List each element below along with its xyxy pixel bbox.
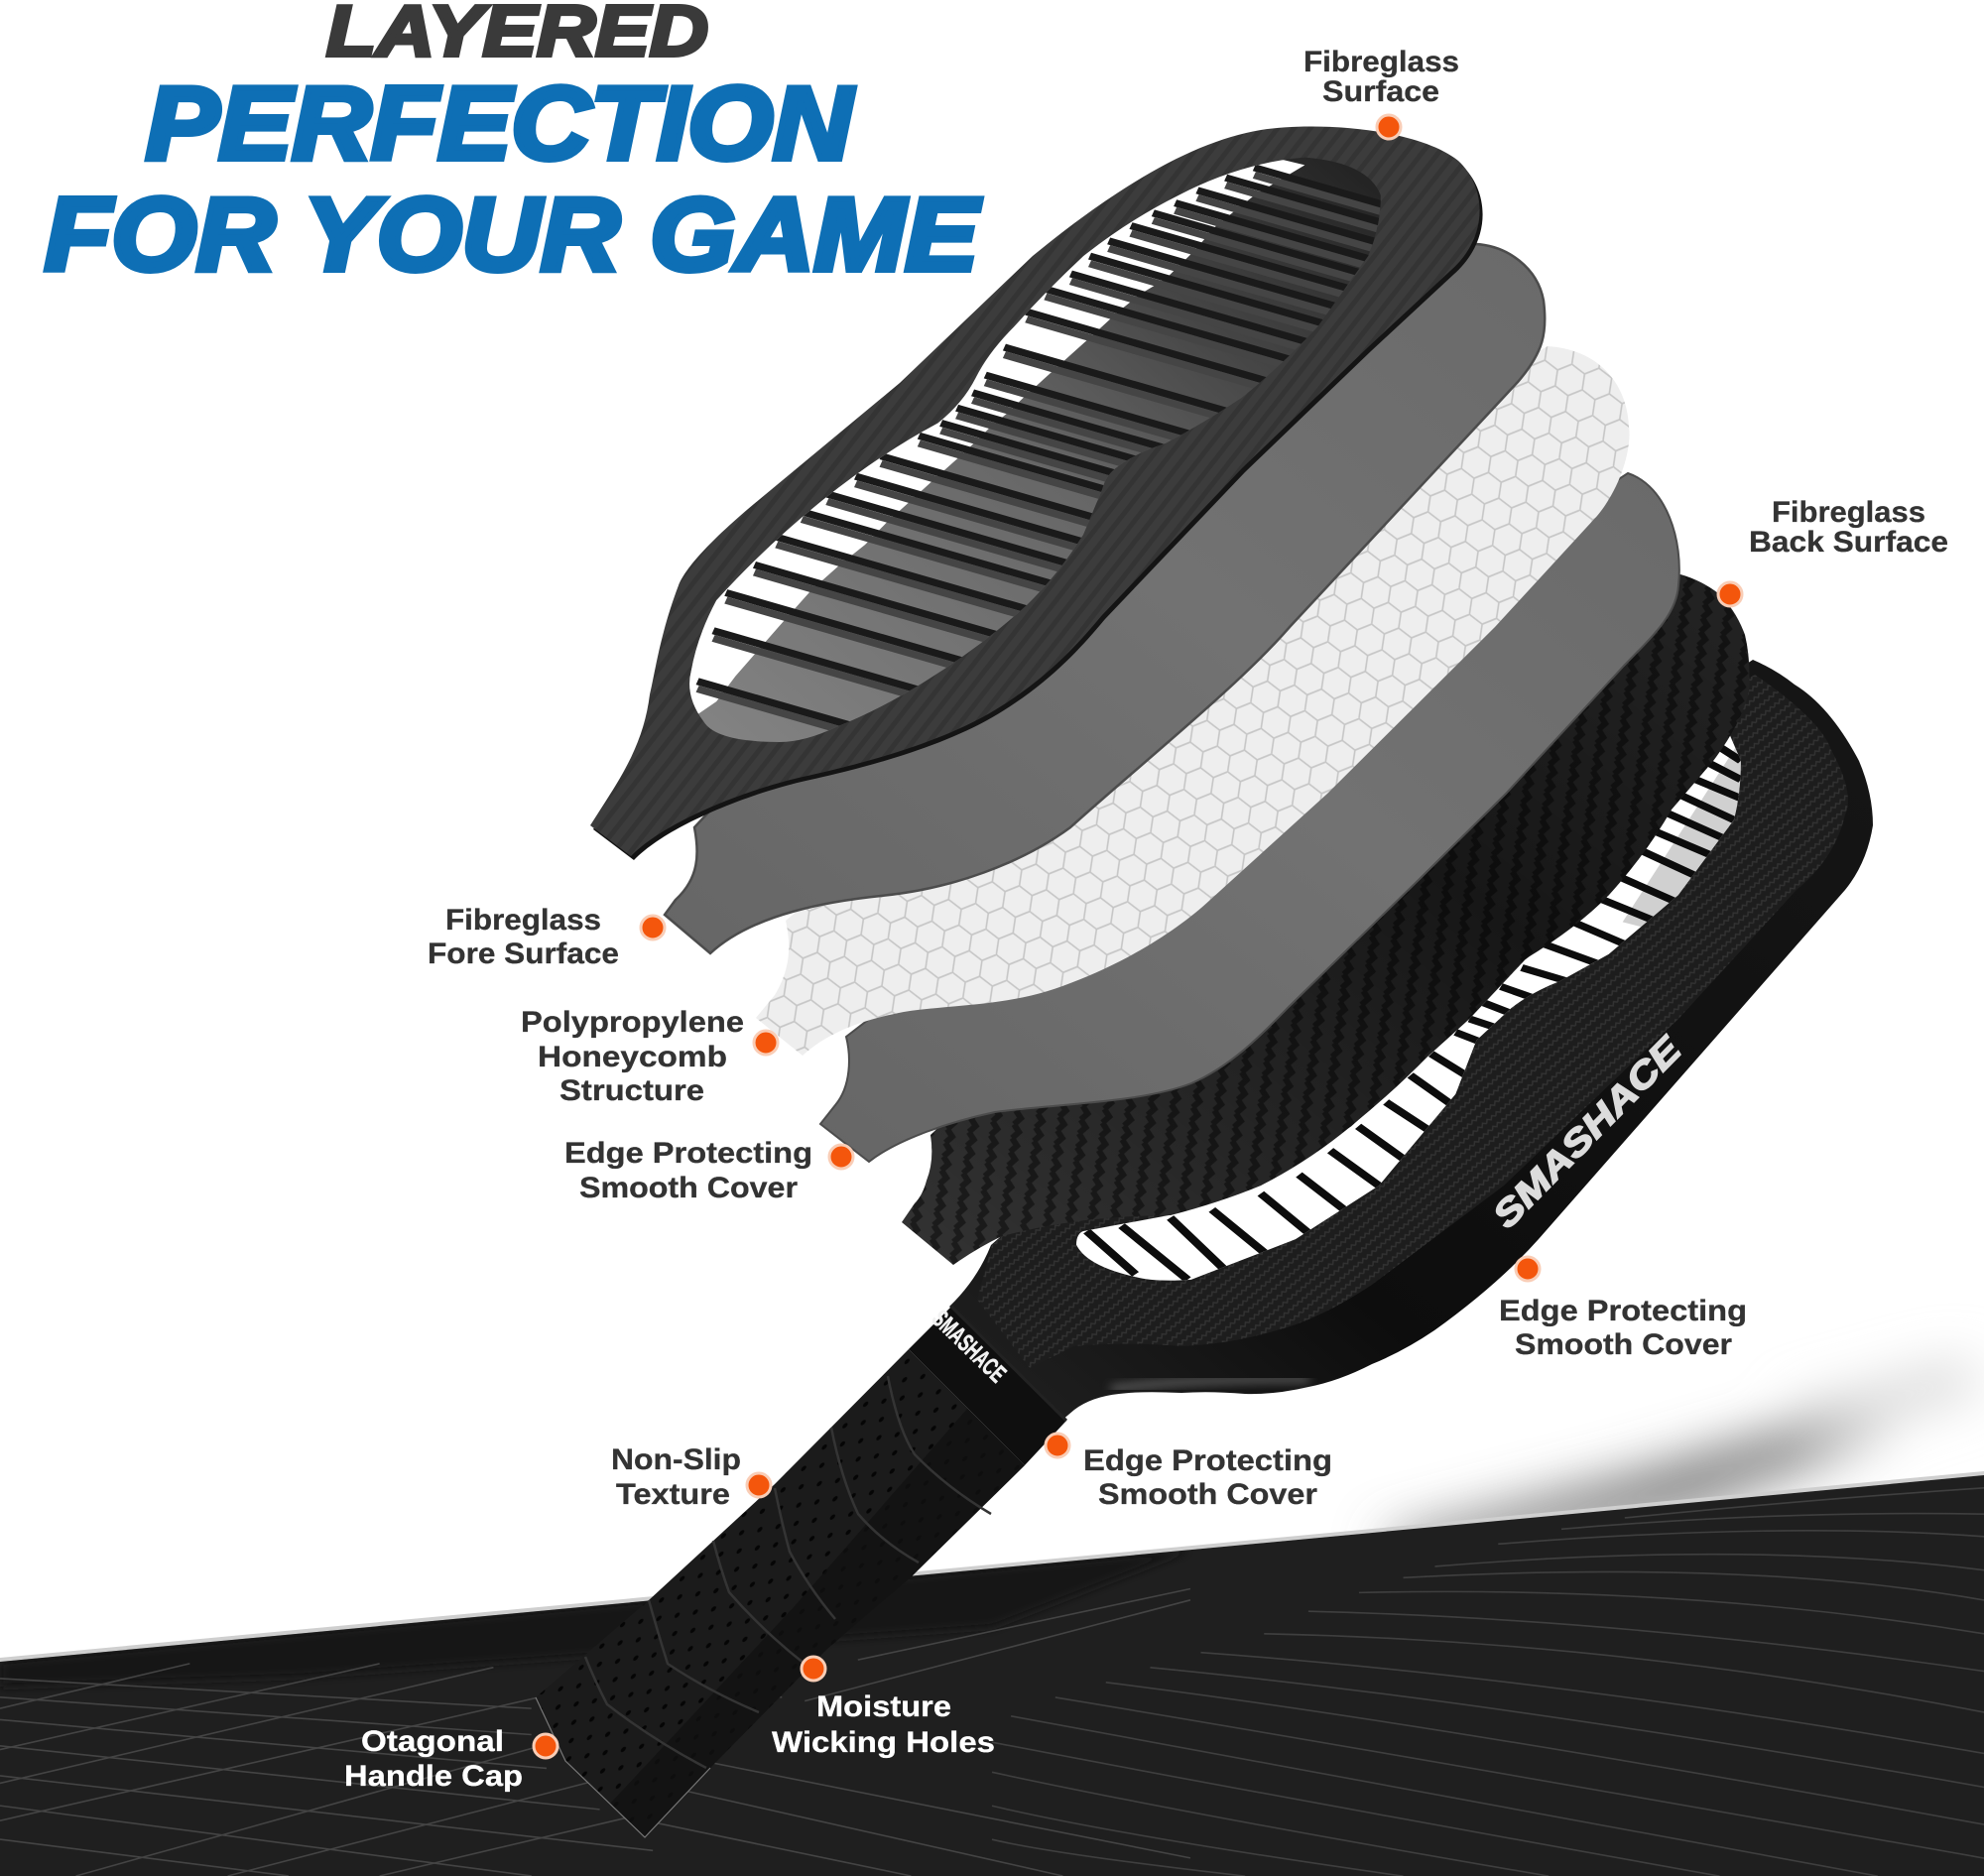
label: Fibreglass Fore Surface xyxy=(428,904,619,970)
marker: Otagonal Handle Cap xyxy=(534,1734,558,1758)
marker: Fibreglass Fore Surface xyxy=(641,916,665,939)
label: Fibreglass Surface: Fibreglass xyxy=(1303,46,1459,78)
top fibreglass surface layer with slats xyxy=(590,127,1483,860)
label: Otagonal Handle Cap: Otagonal xyxy=(361,1725,504,1758)
label: Edge Protecting Smooth Cover (left): Smooth Cover xyxy=(579,1172,798,1204)
marker: Moisture Wicking Holes xyxy=(802,1657,825,1681)
label: Moisture Wicking Holes: Moisture xyxy=(816,1690,951,1723)
marker: Polypropylene Honeycomb xyxy=(754,1031,778,1055)
label: Fibreglass Back Surface: Fibreglass xyxy=(1772,496,1925,529)
label: Non-Slip Texture: Non-Slip xyxy=(611,1443,741,1476)
carbon fibreglass back layer xyxy=(902,574,1750,1265)
handle with overgrip xyxy=(536,1305,1066,1837)
label: Non-Slip Texture: Texture xyxy=(616,1478,730,1511)
label: Edge Protecting Smooth Cover (handle) xyxy=(1083,1444,1332,1511)
label: Fibreglass Back Surface: Back Surface xyxy=(1749,526,1948,559)
title xyxy=(45,0,981,293)
marker: Fibreglass Surface xyxy=(1377,115,1401,139)
title line: FOR YOUR GAME: FOR YOUR GAME xyxy=(45,178,981,293)
label: Fibreglass Back Surface xyxy=(1749,496,1948,559)
white polypropylene honeycomb layer xyxy=(756,346,1630,1056)
label: Fibreglass Surface: Surface xyxy=(1322,75,1439,108)
marker: Fibreglass Back Surface xyxy=(1718,582,1742,606)
label: Edge Protecting Smooth Cover (left) xyxy=(564,1137,812,1204)
label: Moisture Wicking Holes xyxy=(772,1690,995,1759)
marker: Edge Protecting right xyxy=(1516,1257,1540,1281)
slat window xyxy=(689,158,1381,742)
collar band xyxy=(909,1307,1066,1465)
label: Fibreglass Surface xyxy=(1303,46,1459,108)
label: Polypropylene Honeycomb Structure xyxy=(521,1006,744,1107)
label: Polypropylene Honeycomb Structure: Structure xyxy=(559,1074,704,1107)
label: Moisture Wicking Holes: Wicking Holes xyxy=(772,1726,995,1759)
marker: Edge Protecting handle xyxy=(1046,1434,1069,1457)
label: Otagonal Handle Cap xyxy=(344,1725,523,1793)
label: Fibreglass Fore Surface: Fibreglass xyxy=(445,904,601,937)
label: Edge Protecting Smooth Cover (right): Smooth Cover xyxy=(1515,1328,1732,1361)
dark grid floor xyxy=(0,1471,1984,1876)
floor shadow xyxy=(1379,1359,1984,1563)
grey fibreglass fore layer xyxy=(665,244,1545,953)
label: Otagonal Handle Cap: Handle Cap xyxy=(344,1760,523,1793)
label: Edge Protecting Smooth Cover (right): Edge Protecting xyxy=(1499,1295,1747,1327)
label: Fibreglass Fore Surface: Fore Surface xyxy=(428,938,619,970)
label: Non-Slip Texture xyxy=(611,1443,741,1511)
slatted core window xyxy=(1076,736,1741,1281)
paddle back layer: black edge-protected face xyxy=(949,660,1873,1421)
title line: PERFECTION: PERFECTION xyxy=(146,66,854,182)
marker: Non-Slip Texture xyxy=(747,1473,771,1497)
label: Edge Protecting Smooth Cover (left): Edge Protecting xyxy=(564,1137,812,1170)
marker: Edge Protecting left xyxy=(829,1145,853,1169)
grey edge protecting cover layer xyxy=(820,473,1679,1162)
label: Edge Protecting Smooth Cover (handle): Smooth Cover xyxy=(1098,1478,1317,1511)
label: Polypropylene Honeycomb Structure: Polypropylene xyxy=(521,1006,744,1039)
label: Polypropylene Honeycomb Structure: Honeycomb xyxy=(538,1041,727,1073)
label: Edge Protecting Smooth Cover (right) xyxy=(1499,1295,1747,1361)
brand wordmark on rim: SMASHACE xyxy=(1484,1028,1689,1236)
collar wordmark: SMASHACE xyxy=(927,1305,1011,1388)
label: Edge Protecting Smooth Cover (handle): Edge Protecting xyxy=(1083,1444,1332,1477)
